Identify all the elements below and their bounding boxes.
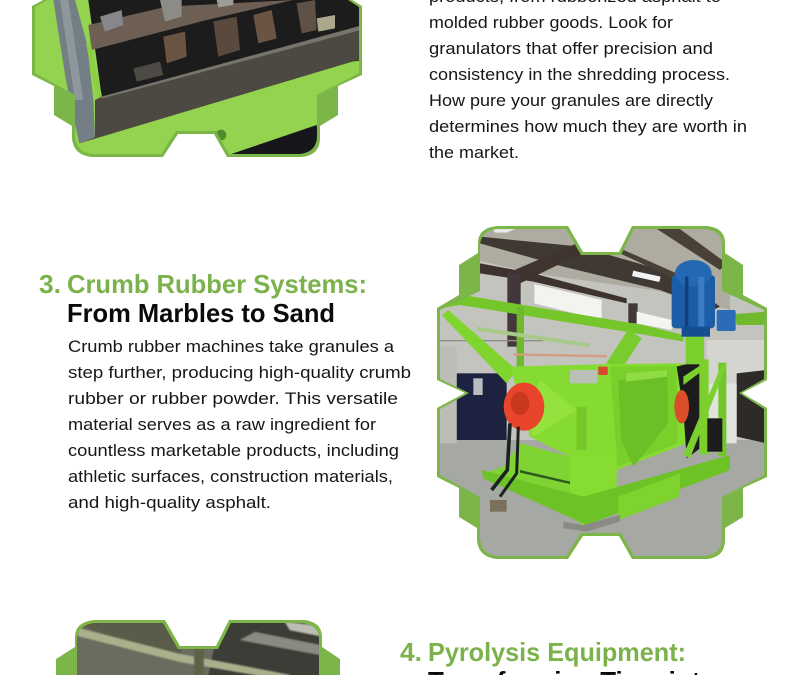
- section 2 body text: molded rubber goods. Look for: [429, 13, 673, 32]
- section 3 heading: Crumb Rubber Systems:: [67, 269, 367, 299]
- section 3 body text: Crumb rubber machines take granules a: [68, 337, 395, 356]
- section 4 photo: pyrolysis equipment: [56, 620, 340, 675]
- section 3 photo: crumb rubber machine: [437, 226, 767, 559]
- section 3 body text: and high-quality asphalt.: [68, 493, 271, 512]
- section 3 body text: rubber or rubber powder. This versatile: [68, 389, 398, 408]
- section 4 heading: Pyrolysis Equipment:: [428, 637, 686, 667]
- section 2 photo: granulator: [32, 0, 362, 157]
- section 2 body text: How pure your granules are directly: [429, 91, 714, 110]
- section 3 body text: material serves as a raw ingredient for: [68, 415, 376, 434]
- section 3 heading: [39, 269, 367, 328]
- section 3 heading: 3.: [39, 269, 61, 299]
- section 2 body text: [429, 0, 747, 162]
- section 4 heading: [400, 637, 716, 675]
- section 2 body text: consistency in the shredding process.: [429, 65, 730, 84]
- section 4 heading: 4.: [400, 637, 422, 667]
- section 3 body text: step further, producing high-quality crumb: [68, 363, 411, 382]
- section 3 heading: From Marbles to Sand: [67, 298, 335, 328]
- section 2 body text: determines how much they are worth in: [429, 117, 747, 136]
- section 3 body text: [68, 337, 411, 512]
- section 3 body text: athletic surfaces, construction materials,: [68, 467, 393, 486]
- section 3 body text: countless marketable products, including: [68, 441, 399, 460]
- section 2 body text: the market.: [429, 143, 519, 162]
- section 2 body text: granulators that offer precision and: [429, 39, 713, 58]
